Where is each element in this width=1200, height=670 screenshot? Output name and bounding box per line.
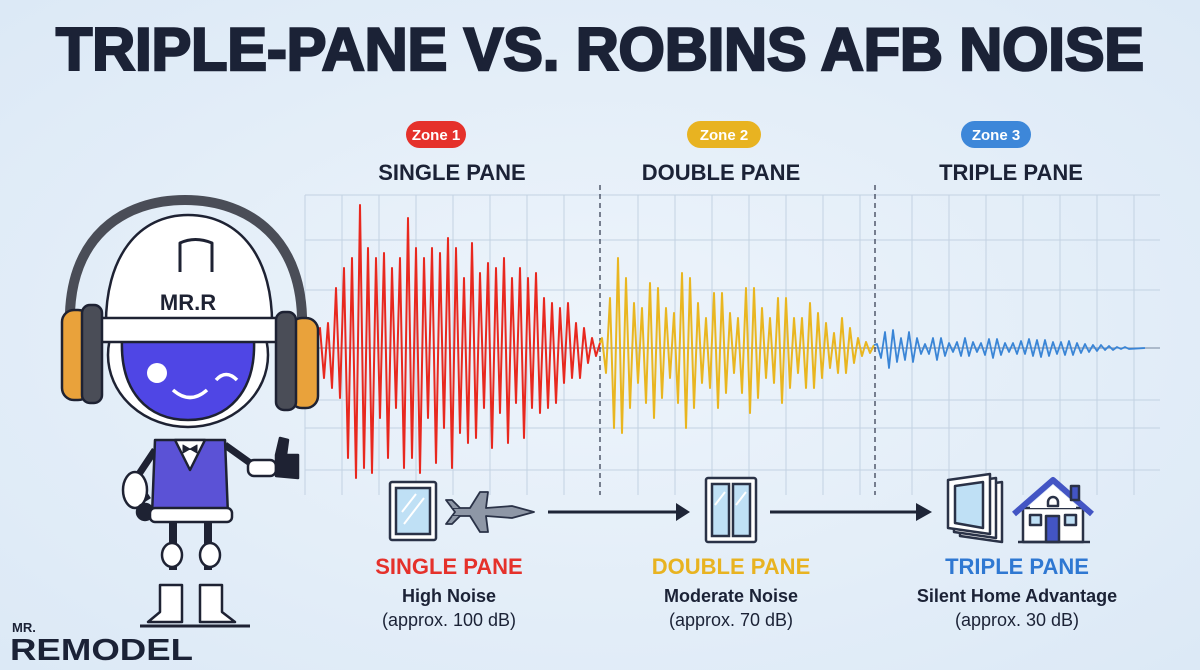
- mascot: Mr. R robot: [62, 200, 318, 626]
- zone 3 header: [939, 121, 1083, 185]
- label: triple pane: Silent Home Advantage: [917, 586, 1117, 606]
- label: single pane: High Noise: [402, 586, 496, 606]
- waveform: triple pane blue: [874, 330, 1145, 368]
- label: single pane: [375, 554, 523, 630]
- icon: house: [1014, 480, 1092, 542]
- label: single pane: SINGLE PANE: [375, 554, 523, 579]
- vest: [152, 440, 228, 515]
- waveform: double pane yellow: [600, 258, 874, 433]
- icon: double pane window: [706, 478, 756, 542]
- logo: Mr. Remodel: REMODEL: [10, 632, 193, 667]
- logo: Mr. Remodel: MR.: [12, 620, 36, 635]
- mascot: Mr. R robot: MR.R: [160, 290, 216, 315]
- earmuffs: [62, 310, 90, 400]
- label: triple pane: (approx. 30 dB): [955, 610, 1079, 630]
- icon: single pane window: [390, 482, 436, 540]
- face: [108, 283, 268, 427]
- zone 2 header: Zone 2: [700, 127, 748, 144]
- label: double pane: [652, 554, 810, 630]
- legs: [173, 510, 208, 570]
- helmet: [106, 215, 272, 330]
- zone 2 header: DOUBLE PANE: [642, 160, 800, 185]
- label: triple pane: [917, 554, 1117, 630]
- arrow 1: [548, 503, 690, 521]
- label: double pane: Moderate Noise: [664, 586, 798, 606]
- waveform: single pane red: [305, 205, 600, 478]
- icon: fighter jet: [446, 492, 534, 532]
- arms: [135, 450, 155, 500]
- icon: triple pane window: [948, 474, 1002, 542]
- label: triple pane: TRIPLE PANE: [945, 554, 1089, 579]
- zone 3 header: TRIPLE PANE: [939, 160, 1083, 185]
- label: double pane: DOUBLE PANE: [652, 554, 810, 579]
- zone 1 header: Zone 1: [412, 127, 460, 144]
- arrow 2: [770, 503, 932, 521]
- logo: Mr. Remodel: [10, 620, 193, 667]
- zone 1 header: SINGLE PANE: [378, 160, 526, 185]
- title: TRIPLE-PANE VS. ROBINS AFB NOISE: [56, 16, 1144, 83]
- zone 2 header: [642, 121, 800, 185]
- zone 3 header: Zone 3: [972, 127, 1020, 144]
- headband: [70, 200, 302, 330]
- zone 1 header: [378, 121, 526, 185]
- label: single pane: (approx. 100 dB): [382, 610, 516, 630]
- label: double pane: (approx. 70 dB): [669, 610, 793, 630]
